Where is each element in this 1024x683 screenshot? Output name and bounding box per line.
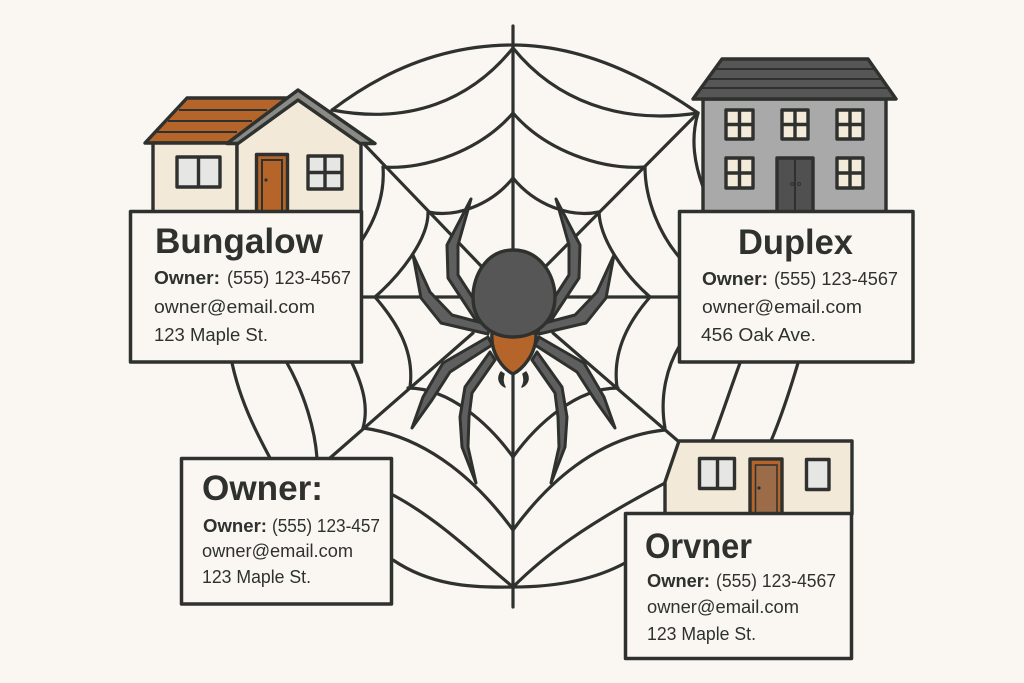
owner contact details xyxy=(202,516,380,587)
bungalow contact details: Owner: xyxy=(154,268,220,288)
duplex contact details: owner@email.com xyxy=(702,297,862,317)
duplex heading: Duplex xyxy=(738,223,854,262)
bottom house walls xyxy=(665,441,852,514)
duplex contact details xyxy=(701,269,898,345)
orvner contact details: (555) 123-4567 xyxy=(716,571,836,591)
card: orvner xyxy=(626,514,852,658)
orvner contact details: Owner: xyxy=(647,571,710,591)
duplex contact details: 456 Oak Ave. xyxy=(701,325,816,345)
bungalow gable trim xyxy=(227,90,375,144)
owner contact details: (555) 123-457 xyxy=(272,516,380,536)
bungalow walls xyxy=(153,143,237,212)
house: duplex xyxy=(693,59,896,213)
duplex windows xyxy=(726,110,863,188)
owner contact details: 123 Maple St. xyxy=(202,567,311,587)
house: bottom right xyxy=(665,441,852,514)
orvner contact details xyxy=(647,571,836,644)
orvner contact details: owner@email.com xyxy=(647,597,799,617)
duplex walls xyxy=(703,99,886,213)
left spider legs xyxy=(412,199,495,483)
bungalow left window xyxy=(177,157,220,187)
bungalow roof xyxy=(145,98,287,143)
owner heading: Owner: xyxy=(202,469,323,508)
bungalow heading: Bungalow xyxy=(155,222,324,261)
bottom house right window xyxy=(806,460,829,490)
right spider legs xyxy=(532,199,615,483)
spider xyxy=(412,199,615,483)
bungalow contact details xyxy=(154,268,351,345)
duplex contact details: (555) 123-4567 xyxy=(774,269,898,289)
card: duplex xyxy=(680,212,913,362)
spider web xyxy=(232,26,798,607)
card: bungalow xyxy=(130,212,362,362)
bungalow right window xyxy=(308,156,342,189)
duplex contact details: Owner: xyxy=(702,269,768,289)
orvner heading: Orvner xyxy=(645,527,752,566)
bungalow contact details: owner@email.com xyxy=(154,297,315,317)
spider pincers xyxy=(499,372,528,387)
spider abdomen xyxy=(492,333,536,374)
house: bungalow xyxy=(145,90,375,212)
spider body xyxy=(473,250,555,337)
duplex roof xyxy=(693,59,896,99)
bungalow contact details: 123 Maple St. xyxy=(154,325,268,345)
owner contact details: Owner: xyxy=(203,516,267,536)
owner contact details: owner@email.com xyxy=(202,541,353,561)
bungalow door xyxy=(256,154,288,212)
bottom house left window xyxy=(700,458,734,488)
bungalow contact details: (555) 123-4567 xyxy=(227,268,351,288)
bottom house door xyxy=(750,459,782,514)
orvner contact details: 123 Maple St. xyxy=(647,624,756,644)
duplex door xyxy=(777,158,813,213)
card: owner xyxy=(182,458,392,604)
